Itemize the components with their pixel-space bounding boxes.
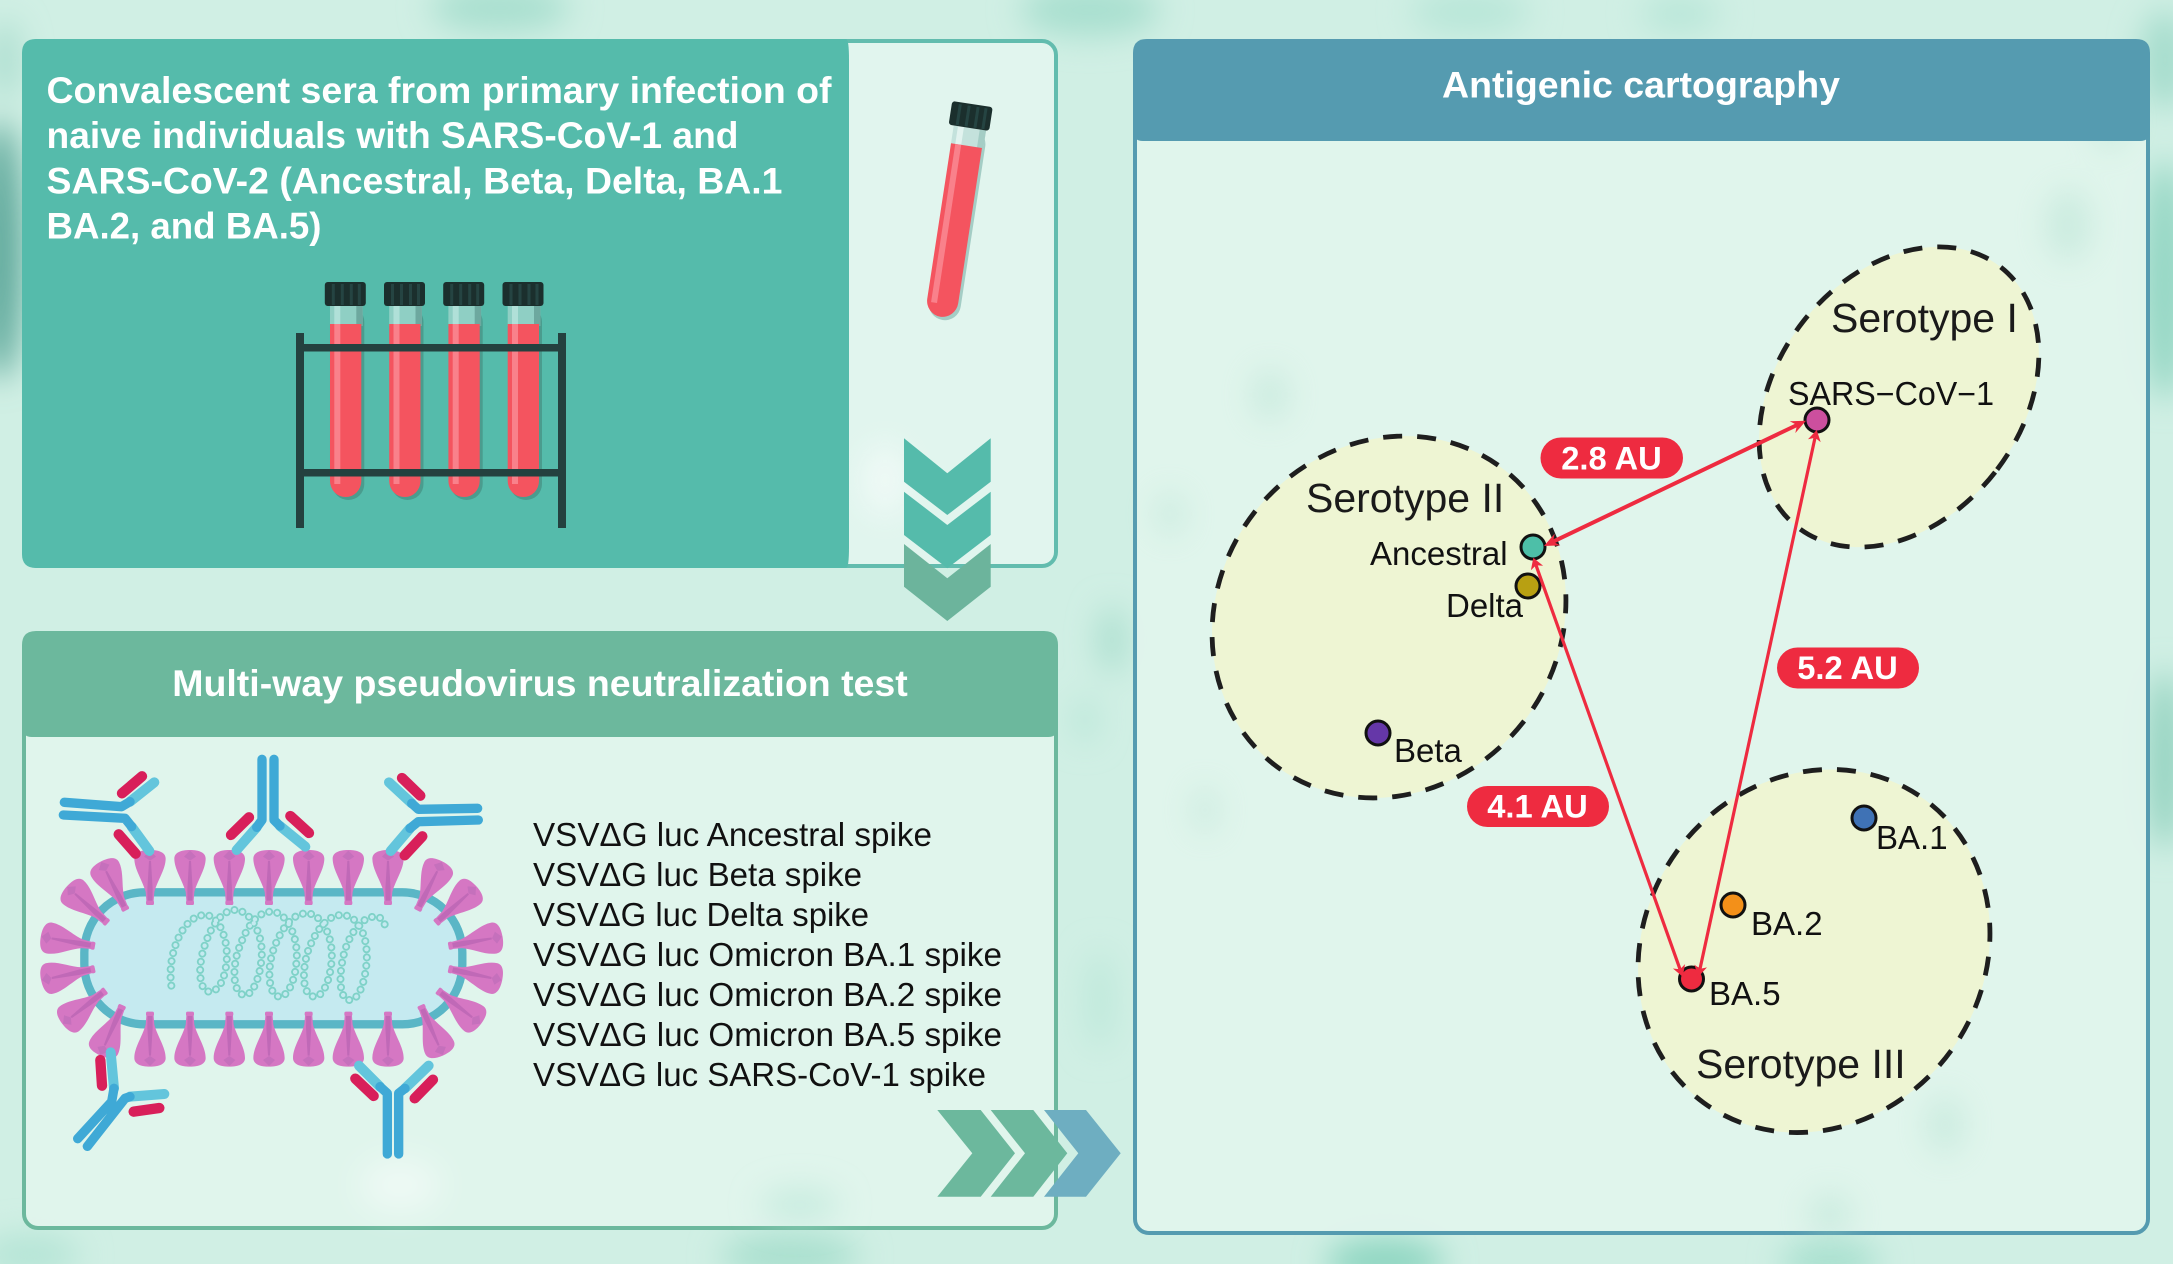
heading: convalescent sera: SARS-CoV-2 (Ancestral, Beta, Delta, BA.1 (46, 160, 782, 202)
label: Delta: Delta (1446, 587, 1524, 624)
label: Serotype III: Serotype III (1696, 1041, 1906, 1087)
point: Ancestral (1521, 535, 1545, 559)
pseudovirus list: VSVΔG luc Delta spike (533, 897, 869, 934)
heading: convalescent sera: Convalescent sera from primary infection of (46, 69, 832, 111)
label: BA.2: BA.2 (1751, 905, 1823, 942)
teal text panel (22, 39, 849, 568)
label pill: 4.1 AU: 4.1 AU (1487, 788, 1588, 824)
arrow: SARS-CoV-1 to BA.5 (1700, 438, 1815, 969)
heading: multi-way test: Multi-way pseudovirus neutralization test (172, 662, 908, 704)
icon: single test tube (919, 101, 993, 323)
label: Ancestral: Ancestral (1370, 535, 1508, 572)
header bar (1133, 39, 2150, 141)
arrow: Ancestral to BA.5 (1536, 565, 1680, 969)
label: Serotype II: Serotype II (1306, 475, 1504, 521)
panel: antigenic cartography (1133, 39, 2150, 1237)
RNA helix (171, 910, 385, 1000)
heading: antigenic cartography: Antigenic cartography (1442, 64, 1840, 106)
point: Beta (1366, 721, 1390, 745)
label pill: 5.2 AU (1777, 648, 1919, 688)
point: BA.2 (1721, 893, 1745, 917)
heading: convalescent sera: naive individuals with SARS-CoV-1 and (46, 114, 738, 156)
label: SARS-CoV-1: SARS−CoV−1 (1788, 375, 1994, 412)
antibodies (63, 759, 478, 1154)
faint background specks in panel (1156, 90, 2128, 1237)
pseudovirus list (533, 817, 1002, 1094)
label: Serotype I: Serotype I (1831, 295, 2018, 341)
pseudovirus list: VSVΔG luc SARS-CoV-1 spike (533, 1057, 986, 1094)
arrow: Ancestral to SARS-CoV-1 (1553, 425, 1797, 542)
white glow behind chevrons (863, 444, 907, 516)
label: Beta: Beta (1394, 732, 1463, 769)
icon: test tube rack (296, 282, 566, 528)
label: BA.1: BA.1 (1876, 819, 1948, 856)
heading: convalescent sera: BA.2, and BA.5) (46, 204, 322, 246)
arrow: downward chevrons (904, 438, 991, 621)
point: SARS-CoV-1 (1805, 408, 1829, 432)
point: Delta (1516, 574, 1540, 598)
pseudovirus list: VSVΔG luc Omicron BA.1 spike (533, 937, 1002, 974)
label pill: 2.8 AU (1540, 438, 1683, 478)
virus capsule (84, 892, 462, 1024)
point: BA.1 (1852, 806, 1876, 830)
label pill: 5.2 AU: 5.2 AU (1797, 649, 1898, 686)
label pill: 4.1 AU (1467, 786, 1609, 827)
arrow: rightward chevrons (937, 1110, 1121, 1197)
pseudovirus list: VSVΔG luc Omicron BA.5 spike (533, 1017, 1002, 1054)
faint glow in panel (360, 1159, 840, 1221)
panel: multi-way pseudovirus neutralization test (22, 631, 1058, 1228)
arrowheads (1531, 421, 1821, 977)
pseudovirus list: VSVΔG luc Omicron BA.2 spike (533, 977, 1002, 1014)
label: BA.5: BA.5 (1709, 975, 1781, 1012)
serotype III cluster (1567, 700, 2061, 1202)
icon: pseudovirus with antibodies (38, 759, 505, 1154)
point: BA.5 (1680, 967, 1704, 991)
label pill: 2.8 AU: 2.8 AU (1561, 440, 1662, 476)
pseudovirus list: VSVΔG luc Ancestral spike (533, 817, 932, 854)
heading: convalescent sera (46, 69, 832, 246)
serotype II cluster (1140, 365, 1638, 869)
header bar (22, 631, 1058, 737)
virus spikes (38, 850, 505, 1067)
serotype I cluster (1701, 192, 2097, 602)
panel: convalescent sera (22, 39, 1056, 568)
pseudovirus list: VSVΔG luc Beta spike (533, 857, 862, 894)
